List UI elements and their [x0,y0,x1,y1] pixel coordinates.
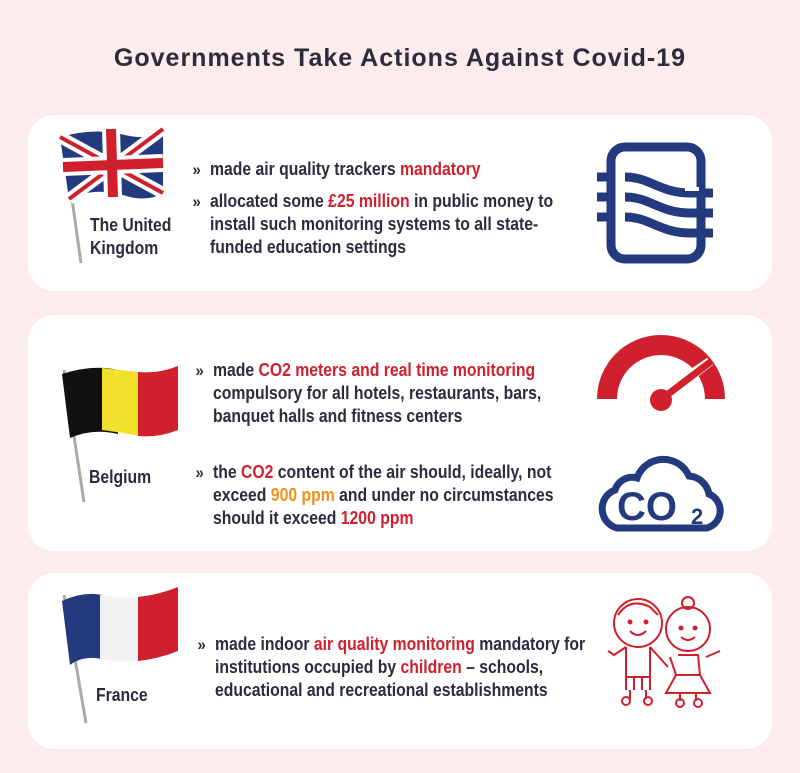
label: uk [90,215,171,258]
text: belgium bullet 1 [196,360,541,426]
text: france bullet: made indoor air quality monitoring mandatory for [215,634,585,654]
text: » [192,160,201,179]
text: uk bullets: allocated some £25 million in public money to [210,191,553,211]
icon: co2 cloud: 2 [691,504,703,529]
text: uk bullets [192,159,553,257]
flag: france [62,587,178,724]
panel: belgium [28,315,772,551]
text: france bullet: institutions occupied by children – schools, [215,657,543,677]
flag: uk [59,127,164,264]
flag: belgium [62,366,178,502]
panel: france [28,573,772,749]
text: belgium bullet 1: compulsory for all hotels, restaurants, bars, [213,383,541,403]
icon: air quality tracker [597,142,713,264]
text: » [196,463,204,482]
panel: united kingdom [28,115,772,291]
text: uk bullets: install such monitoring systems to all state- [210,214,538,234]
text: france bullet: educational and recreational establishments [215,680,548,700]
text: belgium bullet 2: the CO2 content of the air should, ideally, not [213,462,551,482]
icon: gauge [597,335,725,411]
title: Governments Take Actions Against Covid-19 [114,44,686,72]
text: uk bullets: funded education settings [210,237,406,257]
icon: children [608,596,720,708]
text: » [192,192,201,211]
text: » [196,361,204,380]
icon: co2 cloud: CO [617,485,677,529]
text: france bullet [198,634,585,700]
text: » [198,635,206,654]
text: belgium bullet 1: banquet halls and fitness centers [213,406,462,426]
text: belgium bullet 1: made CO2 meters and real time monitoring [213,360,535,380]
icon: co2 cloud [598,456,724,532]
text: belgium bullet 2 [196,462,554,528]
text: belgium bullet 2: exceed 900 ppm and under no circumstances [213,485,554,505]
label: uk: Kingdom [90,238,158,258]
label: france: France [96,685,148,705]
label: belgium: Belgium [89,467,151,487]
label: uk: The United [90,215,171,235]
text: belgium bullet 2: should it exceed 1200 ppm [213,508,413,528]
text: uk bullets: made air quality trackers mandatory [210,159,480,179]
